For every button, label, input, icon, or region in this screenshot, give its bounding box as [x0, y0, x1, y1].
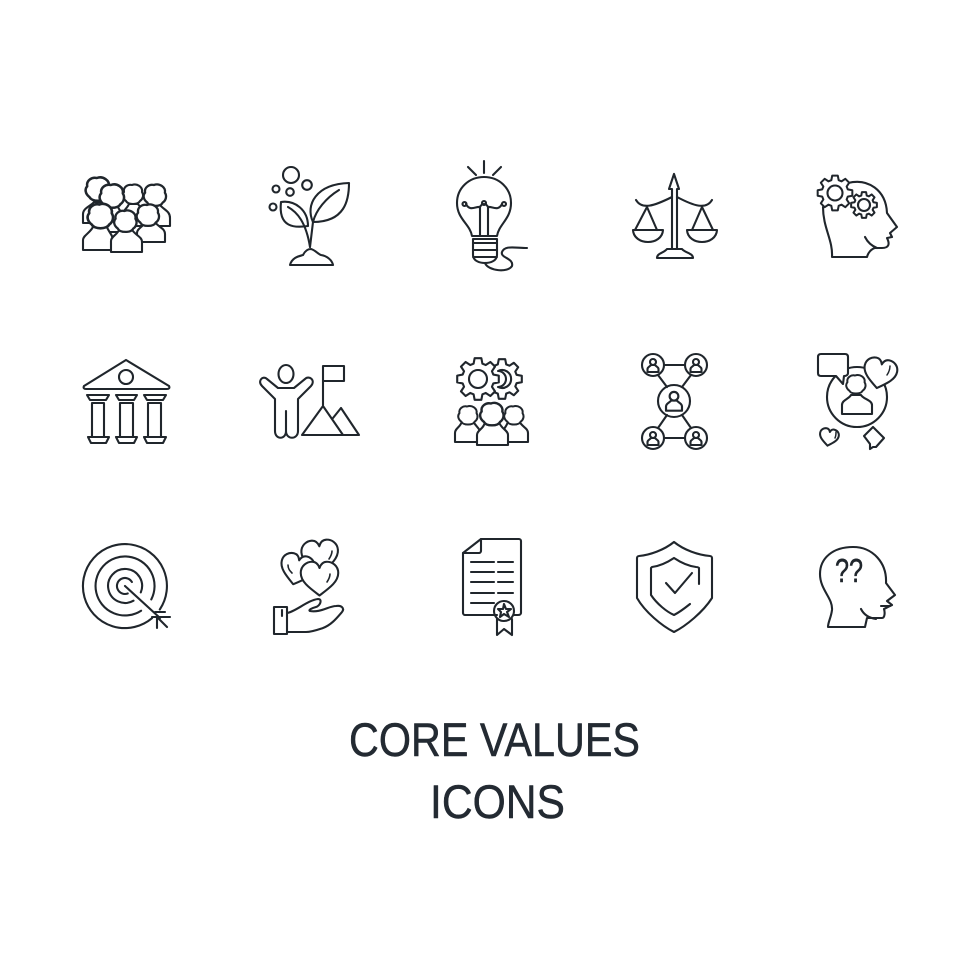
icon: people network	[642, 354, 707, 449]
icon: head with question marks	[820, 547, 895, 627]
question marks: ??	[835, 552, 863, 589]
icon: person with summit flag	[260, 365, 359, 438]
icon: balance scales	[633, 174, 717, 258]
icon: person with speech bubbles and hearts	[818, 354, 899, 449]
icon: classical temple	[84, 360, 169, 443]
icon: crowd of people	[83, 177, 170, 252]
icon: security shield with check	[637, 542, 712, 632]
icon: certificate document	[463, 539, 521, 635]
title: CORE VALUES	[349, 713, 640, 766]
icon: hand holding hearts	[274, 539, 343, 634]
icon: head with gears	[818, 176, 897, 257]
icon: light bulb	[457, 161, 527, 270]
icon: growing plant	[270, 167, 349, 265]
icon: target with arrow	[83, 544, 170, 628]
title: ICONS	[430, 775, 565, 828]
icon: team with gears	[455, 358, 528, 445]
title	[349, 713, 640, 828]
